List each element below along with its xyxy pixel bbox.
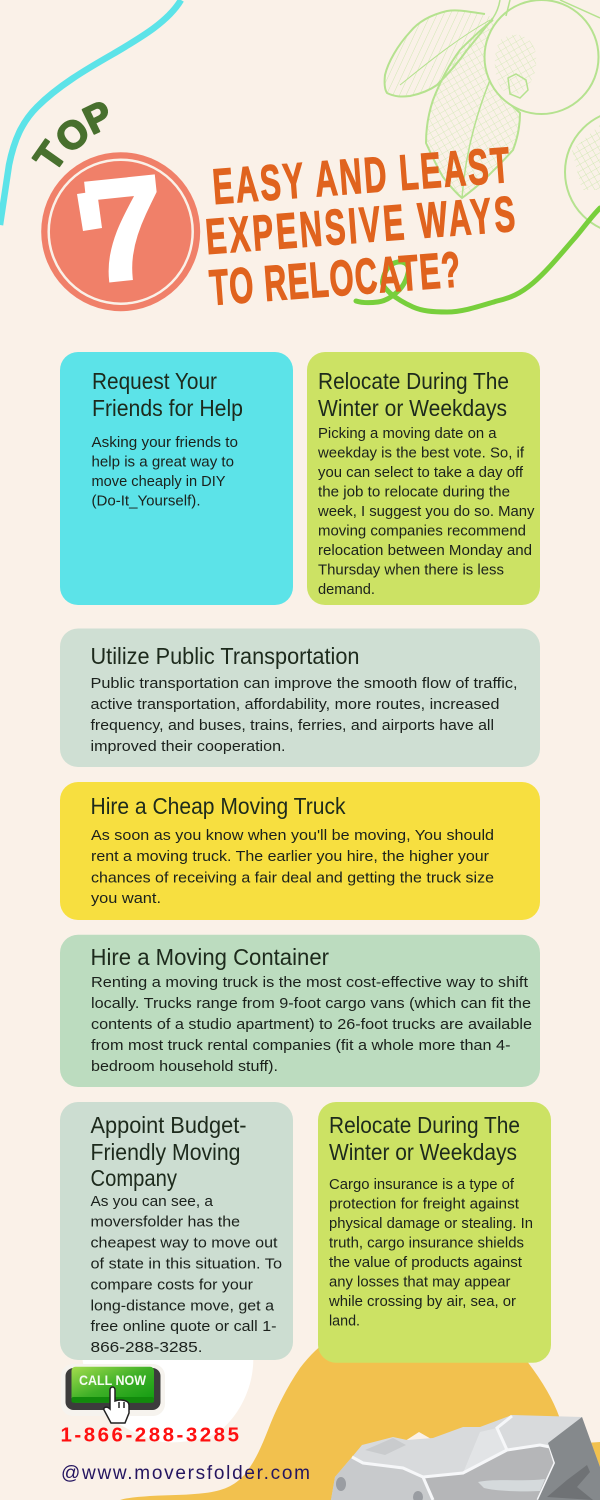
- decoration: white blob: [81, 1350, 253, 1442]
- heading: appoint budget-friendly company: [90, 1112, 246, 1191]
- text: request your friends: [92, 435, 238, 510]
- icon: pointing hand: [104, 1387, 129, 1423]
- badge: red circle with 7: [41, 144, 200, 314]
- text: relocate during winter: week, I suggest you do so. Many: [317, 504, 535, 520]
- decoration: orange blob: [120, 1340, 600, 1500]
- text: hire a cheap moving truck: [91, 828, 494, 907]
- heading: relocate during winter: Relocate During The: [318, 368, 509, 394]
- button: call now: [61, 1364, 165, 1423]
- panel: hire a moving container: [60, 935, 540, 1087]
- text: hire a cheap moving truck: As soon as you know when you'll be moving, You should: [91, 828, 494, 844]
- text: utilize public transportation: Public transportation can improve the smooth flow of traffic,: [90, 676, 518, 692]
- text: appoint budget-friendly company: free online quote or call 1-: [90, 1319, 277, 1335]
- text: cargo insurance: any losses that may appear: [329, 1274, 511, 1290]
- text: hire a cheap moving truck: you want.: [91, 891, 161, 907]
- text: relocate during winter: Thursday when there is less: [318, 562, 504, 578]
- text: utilize public transportation: [90, 676, 518, 755]
- text: cargo insurance: physical damage or stealing. In: [329, 1216, 533, 1232]
- text: relocate during winter: weekday is the best vote. So, if: [317, 446, 525, 462]
- heading: cargo insurance: Relocate During The: [329, 1112, 520, 1138]
- panel: utilize public transportation: [60, 628, 540, 767]
- text: appoint budget-friendly company: 866-288-3285.: [90, 1340, 202, 1356]
- panel: hire a cheap moving truck: [60, 782, 540, 920]
- stem: top: [493, 0, 600, 18]
- label: TOP: T: [26, 135, 75, 179]
- text: phone number: 1-866-288-3285: [60, 1424, 239, 1447]
- text: relocate during winter: [317, 426, 535, 598]
- heading: cargo insurance: [329, 1112, 520, 1165]
- label: TOP: O: [48, 109, 98, 162]
- text: appoint budget-friendly company: of state in this situation. To: [90, 1256, 282, 1272]
- text: cargo insurance: Cargo insurance is a type of: [329, 1177, 515, 1193]
- text: cargo insurance: the value of products against: [329, 1255, 522, 1271]
- text: request your friends: Asking your friends to: [92, 435, 238, 451]
- badge numeral 7: 7: [76, 144, 173, 314]
- text: cargo insurance: protection for freight against: [329, 1196, 519, 1212]
- text: relocate during winter: relocation between Monday and: [318, 543, 532, 559]
- text: hire a cheap moving truck: chances of receiving a fair deal and getting the truck size: [91, 870, 494, 886]
- text: appoint budget-friendly company: cheapest way to move out: [90, 1236, 278, 1252]
- heading: hire a cheap moving truck: Hire a Cheap Moving Truck: [90, 793, 346, 819]
- text: appoint budget-friendly company: [90, 1194, 282, 1356]
- heading: utilize public transportation: Utilize Public Transportation: [90, 643, 360, 669]
- title: EXPENSIVE WAYS: [204, 185, 517, 265]
- title: EASY AND LEAST: [211, 136, 512, 215]
- leaf: upper left: [385, 10, 493, 97]
- text: relocate during winter: Picking a moving date on a: [318, 426, 497, 442]
- text: cargo insurance: [328, 1177, 533, 1330]
- text: relocate during winter: you can select to take a day off: [318, 465, 524, 481]
- title: TO RELOCATE?: [208, 241, 462, 316]
- text: hire a cheap moving truck: rent a moving truck. The earlier you hire, the higher your: [91, 849, 489, 865]
- panel: relocate during winter: [307, 352, 540, 605]
- text: hire a moving container: contents of a studio apartment) to 26-foot trucks are available: [91, 1017, 532, 1033]
- heading: request your friends: [92, 368, 243, 421]
- button label: CALL NOW: [79, 1372, 147, 1388]
- panel: cargo insurance: [318, 1102, 551, 1363]
- illustration: fruit branch line art: [385, 0, 600, 234]
- panel: appoint budget-friendly company: [60, 1102, 293, 1360]
- fruit: large round fruit: [484, 0, 598, 114]
- panel: request your friends: [60, 352, 293, 605]
- text: website: @www.moversfolder.com: [61, 1463, 310, 1484]
- text: request your friends: help is a great way to: [92, 454, 234, 470]
- heading: request your friends: Request Your: [92, 368, 217, 394]
- text: hire a moving container: locally. Trucks range from 9-foot cargo vans (which can fit the: [91, 996, 531, 1012]
- text: hire a moving container: Renting a moving truck is the most cost-effective way to shift: [91, 975, 528, 991]
- heading: relocate during winter: [318, 368, 509, 421]
- leaf: large lower: [426, 20, 520, 198]
- heading: request your friends: Friends for Help: [92, 395, 243, 421]
- label: TOP: P: [77, 93, 119, 143]
- text: appoint budget-friendly company: long-distance move, get a: [90, 1298, 275, 1314]
- text: utilize public transportation: frequency, and buses, trains, ferries, and airports have all: [90, 718, 494, 734]
- text: appoint budget-friendly company: moversfolder has the: [90, 1214, 240, 1230]
- text: appoint budget-friendly company: compare costs for your: [90, 1278, 253, 1294]
- text: cargo insurance: while crossing by air, sea, or: [328, 1294, 516, 1310]
- text: appoint budget-friendly company: As you can see, a: [90, 1194, 214, 1210]
- label: TOP: [26, 93, 119, 179]
- heading: relocate during winter: Winter or Weekdays: [318, 395, 507, 421]
- illustration: grey rock: [331, 1415, 600, 1500]
- heading: appoint budget-friendly company: Appoint Budget-: [90, 1112, 246, 1138]
- text: relocate during winter: the job to relocate during the: [318, 484, 510, 500]
- text: utilize public transportation: active transportation, affordability, more routes, increased: [90, 697, 500, 713]
- text: utilize public transportation: improved their cooperation.: [90, 739, 286, 755]
- text: relocate during winter: demand.: [318, 582, 375, 598]
- text: request your friends: (Do-It_Yourself).: [92, 494, 200, 510]
- text: request your friends: move cheaply in DIY: [92, 474, 226, 490]
- heading: appoint budget-friendly company: Company: [90, 1165, 177, 1191]
- text: hire a moving container: from most truck rental companies (fit a whole more than 4-: [91, 1038, 511, 1054]
- heading: cargo insurance: Winter or Weekdays: [329, 1139, 517, 1165]
- text: hire a moving container: bedroom household stuff).: [91, 1059, 278, 1075]
- fruit: right edge fruit: [565, 110, 600, 234]
- text: cargo insurance: truth, cargo insurance shields: [329, 1236, 524, 1252]
- decoration: green vine: [356, 208, 600, 312]
- decoration: cyan curve: [0, 0, 181, 225]
- heading: appoint budget-friendly company: Friendly Moving: [90, 1139, 240, 1165]
- title: [204, 136, 517, 316]
- text: relocate during winter: moving companies recommend: [318, 524, 526, 540]
- text: cargo insurance: land.: [329, 1314, 360, 1330]
- text: hire a moving container: [91, 975, 532, 1075]
- heading: hire a moving container: Hire a Moving Container: [90, 944, 329, 970]
